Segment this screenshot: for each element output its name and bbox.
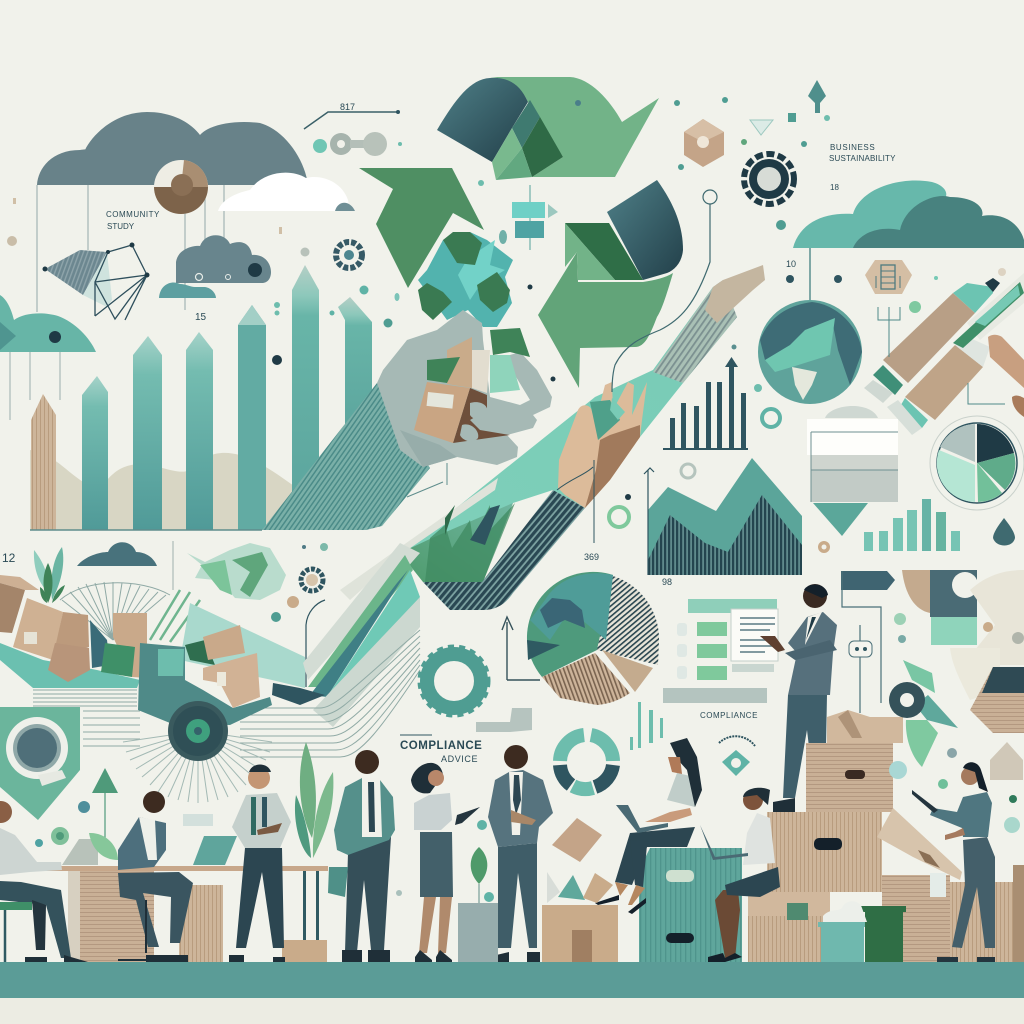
person: standing man in light shirt <box>229 764 291 962</box>
illustration: open box center <box>542 872 618 962</box>
illustration: plant pot center <box>458 903 498 962</box>
chart: donut <box>560 735 613 789</box>
text: business sustainability: BUSINESS <box>830 143 875 152</box>
cloud: small dark with icons <box>176 235 271 283</box>
illustration: pencils and tan rolls <box>864 268 1024 435</box>
person: man on boxes <box>760 584 837 812</box>
illustration: tan leaf and puzzle right <box>902 570 978 645</box>
chart: pie with ring <box>930 416 1024 510</box>
illustration: green sticks <box>150 590 200 642</box>
person: seated person far left <box>0 801 88 962</box>
illustration: slope and ribbon <box>0 543 420 727</box>
chart: rising bars <box>30 265 372 530</box>
text: compliance advice <box>400 735 482 764</box>
illustration: fold icon <box>552 818 602 862</box>
chart: mini bars <box>663 357 748 450</box>
text: community study <box>106 210 160 231</box>
illustration: mint long arm <box>400 265 765 580</box>
arrow: recycle right <box>538 180 683 388</box>
illustration: hatched dome sunburst <box>60 582 170 640</box>
label: 18: 18 <box>830 183 839 192</box>
icon: small recycle in hand <box>418 232 513 327</box>
illustration: green grass cuff <box>400 503 515 582</box>
icon: thin wire from circle <box>612 190 717 392</box>
icon: house outline <box>990 742 1023 780</box>
icon: dark gear <box>744 154 794 204</box>
cloud: small slate mid-left <box>77 542 157 566</box>
arrow: recycle left <box>359 168 484 288</box>
icon: leaves with gear <box>889 660 958 767</box>
label: 12: 12 <box>2 551 16 565</box>
icon: shield with tape <box>0 707 80 820</box>
text: compliance advice: ADVICE <box>441 754 478 764</box>
arrow: up small <box>502 617 540 680</box>
chart: mountain area <box>644 458 802 575</box>
label: 98: 98 <box>662 577 672 587</box>
cloud: large slate top left <box>37 112 308 312</box>
icon: gear small dark <box>336 242 362 268</box>
icon: teal ring <box>762 409 780 427</box>
icon: building hexagon <box>865 260 912 294</box>
label: 10: 10 <box>786 259 796 269</box>
vertical divider stem <box>172 541 174 590</box>
illustration: truck with parcels <box>138 625 272 761</box>
arrow: recycle top <box>437 77 659 180</box>
illustration: pale hatched band <box>340 478 498 600</box>
icon: badge with arc <box>719 736 755 776</box>
chart: pie with hatching <box>527 572 659 705</box>
illustration: plant behind <box>295 742 487 903</box>
icon: fish recycle shape <box>187 543 286 600</box>
illustration: teal drum <box>639 848 742 962</box>
label: 15: 15 <box>195 312 207 323</box>
icon: key tag <box>476 708 532 732</box>
chart: thin teal spikes <box>630 702 663 750</box>
icon: network polygon <box>42 242 150 320</box>
icon: small fork and L line <box>878 307 1005 404</box>
illustration: globe <box>758 300 862 404</box>
chart: document panel with arrow <box>807 406 898 536</box>
illustration: low box <box>748 892 830 962</box>
illustration: stacked cardboard boxes right <box>767 710 1024 962</box>
cloud: teal left <box>0 295 96 420</box>
cloud: small teal <box>159 283 216 298</box>
icon: warning triangle <box>92 768 118 842</box>
chart: checklist <box>663 599 778 703</box>
illustration: plant top-left <box>34 547 65 603</box>
illustration: wavy lines <box>33 630 420 757</box>
illustration: wheel sunburst <box>123 731 272 803</box>
person: man with dark suit center <box>488 745 553 962</box>
illustration: trash bins <box>818 901 906 962</box>
icon: gear and key <box>313 132 402 156</box>
icon: leaf by desk <box>89 833 118 860</box>
label: thin line under hand <box>407 463 447 497</box>
text: community study: COMMUNITY <box>106 210 160 219</box>
icon: triangle outline <box>750 120 773 135</box>
icon: tan hexagon <box>684 119 724 167</box>
chart: small teal bars <box>864 499 960 551</box>
icon: small half dome under white cloud <box>335 203 355 211</box>
text: compliance label: COMPLIANCE <box>700 711 758 720</box>
cloud: teal top right <box>793 181 1024 300</box>
illustration: box pile left <box>0 575 147 682</box>
person: woman standing right <box>912 762 995 962</box>
text: community study: STUDY <box>107 222 135 231</box>
illustration: lamp stem <box>306 600 325 687</box>
illustration: desk with boxes <box>27 836 328 962</box>
icon: small sign <box>183 814 213 826</box>
icon: parcels in hand <box>414 328 530 443</box>
person: woman seated on drum <box>595 738 702 914</box>
text: business sustainability <box>829 143 896 163</box>
illustration: hand holding sleeve hatch <box>262 310 552 530</box>
person: man in green jacket <box>328 750 395 962</box>
text: business sustainability: SUSTAINABILITY <box>829 154 896 163</box>
icon: flag post and lines <box>841 571 895 713</box>
text: compliance advice: COMPLIANCE <box>400 740 482 752</box>
cloud: white <box>218 173 350 211</box>
icon: flow blocks near recycle <box>499 185 558 250</box>
icon: small gear mid-left <box>301 569 323 591</box>
label: 817 with leader: 817 <box>340 102 355 112</box>
scattered dots <box>7 97 1020 902</box>
illustration: open hand <box>557 382 647 543</box>
floor band <box>0 962 1024 1024</box>
icon: diamond pin <box>808 80 826 113</box>
illustration: pale fan and hexagon <box>950 570 1024 733</box>
illustration: striped cuff <box>423 490 585 610</box>
label: 369: 369 <box>584 552 599 562</box>
person: seated man with desk <box>118 791 193 962</box>
chart: brown radial pie <box>154 160 208 214</box>
icon: water drop <box>993 518 1015 546</box>
person: woman seated with laptop <box>700 788 780 962</box>
person: woman with tablet <box>411 763 480 962</box>
label: 817 with leader <box>304 102 400 129</box>
icon: teal gear large <box>420 647 488 715</box>
